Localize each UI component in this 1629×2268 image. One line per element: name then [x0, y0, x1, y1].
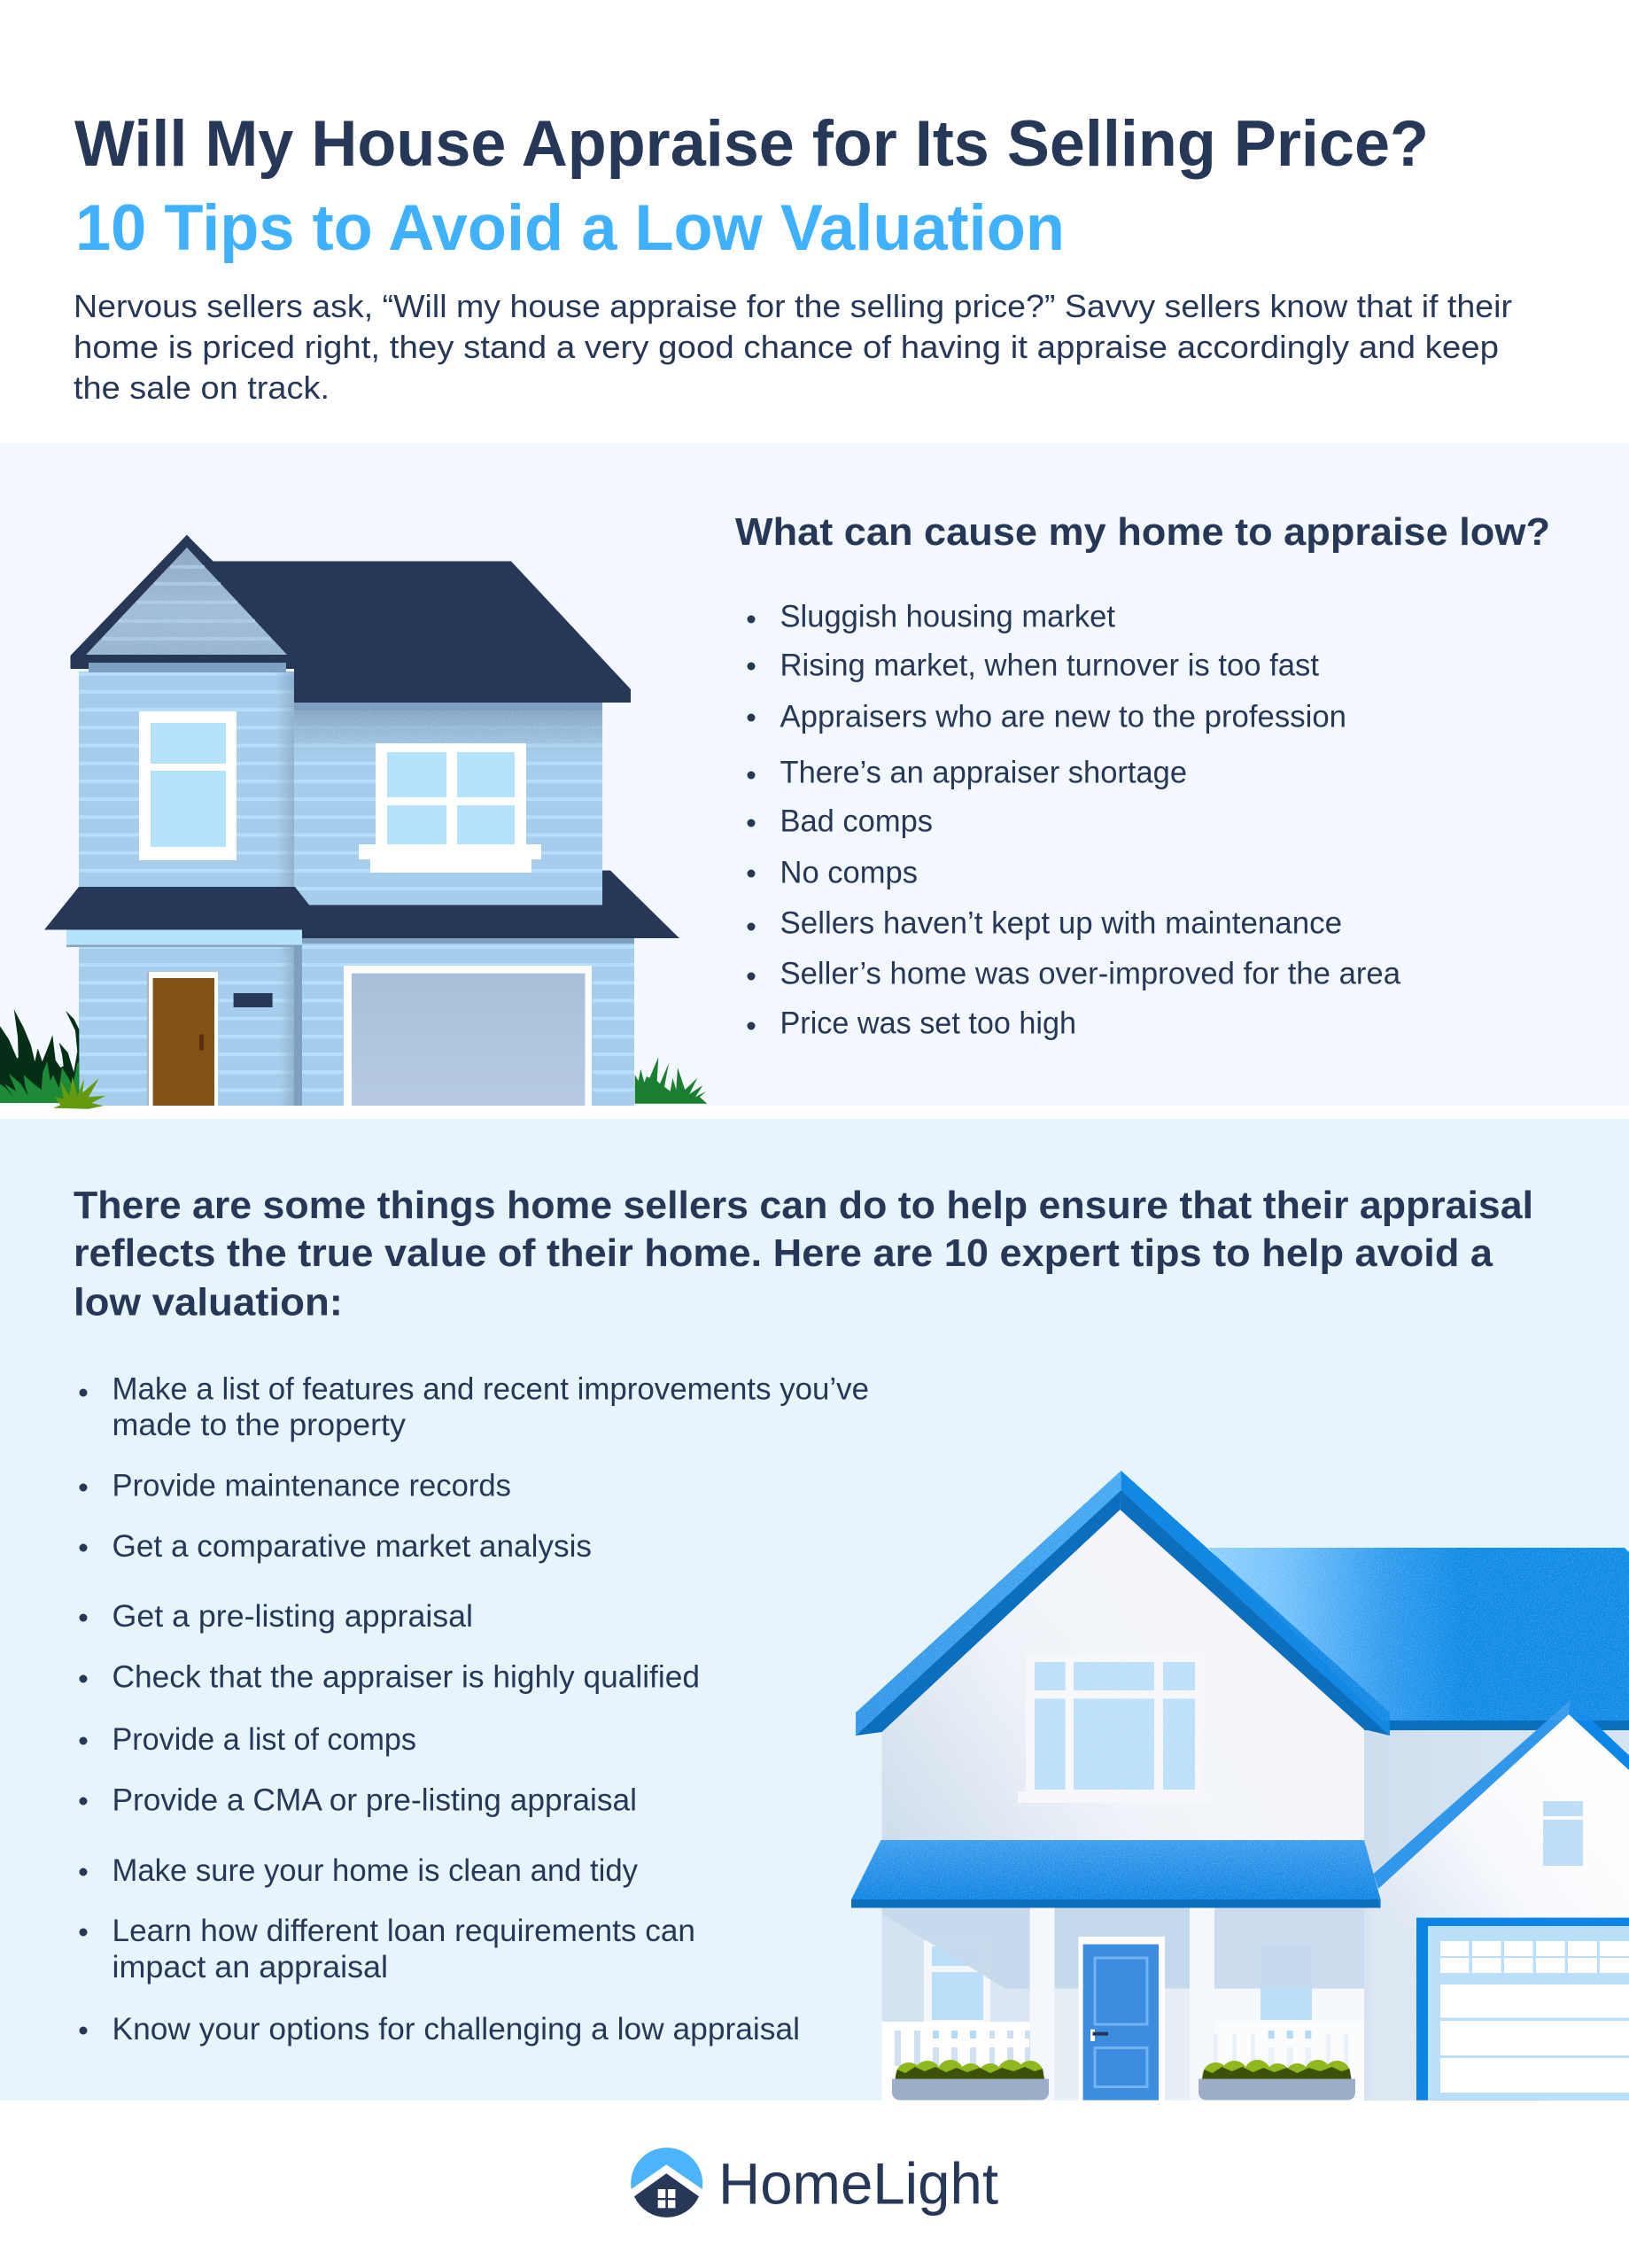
bullet list: causes: Seller’s home was over-improved for the area [780, 957, 1401, 990]
bullet list: causes: Sluggish housing market [780, 599, 1115, 634]
logo icon [631, 2148, 702, 2218]
porch roof [851, 1840, 1381, 1899]
bullet list: causes: Appraisers who are new to the profession [780, 700, 1346, 734]
porch left wall shade [882, 1907, 1030, 2023]
right window with sill [359, 743, 541, 873]
upper wall [882, 1510, 1364, 1843]
bullet list: causes: Sellers haven’t kept up with maintenance [780, 905, 1342, 941]
bullet list: tips: Provide a list of comps [112, 1722, 416, 1757]
intro paragraph: the sale on track. [74, 369, 330, 406]
bullet list: tips: Get a pre-listing appraisal [112, 1599, 473, 1634]
left porch window [924, 1940, 990, 2022]
back roof fascia [1364, 1720, 1629, 1730]
icon: green grass left [0, 1061, 79, 1103]
lower column [1364, 1887, 1417, 2101]
house number plate [234, 993, 273, 1007]
tower corner shading [275, 672, 294, 887]
bullet list: tips: Know your options for challenging a low appraisal [112, 2012, 800, 2047]
lower roof [44, 870, 679, 938]
lower right wall [302, 938, 634, 1106]
lower left wall [79, 947, 294, 1106]
bullet list: causes: There’s an appraiser shortage [780, 755, 1187, 790]
bullet list: causes: Rising market, when turnover is too fast [780, 649, 1319, 682]
main gable roof right slope [1121, 1471, 1390, 1736]
bullet list: causes: Price was set too high [780, 1006, 1076, 1040]
bullet list: causes: No comps [780, 856, 918, 889]
tower soffit [89, 663, 286, 672]
left window [139, 711, 237, 860]
heading: tips intro: reflects the true value of their home. Here are 10 expert tips to help avoid a [74, 1231, 1493, 1275]
logo wordmark: HomeLight [718, 2150, 998, 2216]
bullet list: tips: Make sure your home is clean and tidy [112, 1853, 638, 1888]
heading: causes: What can cause my home to appraise low? [735, 510, 1550, 554]
back roof [1208, 1548, 1629, 1720]
bullet list: tips: Check that the appraiser is highly qualified [112, 1660, 700, 1694]
right gable roof edge right [1569, 1700, 1629, 1770]
bullet list: tips: made to the property [112, 1408, 407, 1442]
left fence [882, 2022, 1030, 2101]
porch lower wall [882, 1907, 1364, 2101]
left planter [892, 2078, 1049, 2100]
siding grain texture [86, 548, 602, 1103]
right planter [1198, 2078, 1355, 2100]
logo: HomeLight [631, 2148, 998, 2218]
left shrubs [895, 2060, 1044, 2089]
illustration: white house with blue roof [851, 1471, 1629, 2101]
porch columns [1029, 1907, 1214, 2101]
illustration: blue two-storey house [0, 535, 707, 1109]
lower soffit [302, 938, 634, 944]
right porch window [1261, 1946, 1312, 2020]
small gable window [1543, 1801, 1583, 1866]
upper window [1018, 1655, 1211, 1803]
main gable roof right underside [1120, 1490, 1390, 1736]
bullet list: tips: Make a list of features and recent improvements you’ve [112, 1371, 869, 1407]
panel: expert tips [0, 1119, 1629, 2101]
porch fascia [66, 929, 302, 944]
heading: tips intro: low valuation: [74, 1281, 343, 1324]
intro paragraph: home is priced right, they stand a very good chance of having it appraise accordingly and keep [74, 329, 1499, 365]
icon: green grass right [635, 1057, 707, 1104]
intro paragraph [74, 288, 1512, 406]
right soffit [294, 703, 602, 711]
bullet list: tips [80, 1371, 869, 2047]
back wall [1364, 1730, 1629, 1907]
right wall [294, 703, 602, 905]
main gable roof left slope [856, 1471, 1121, 1736]
icon: yellow-green tuft [53, 1076, 105, 1109]
roof and wall grain texture [851, 1471, 1629, 2101]
gable outer roof [71, 535, 295, 669]
bullet list: causes [748, 599, 1401, 1040]
bullet list: tips: Provide a CMA or pre-listing appraisal [112, 1783, 637, 1818]
bullet list: tips: impact an appraisal [112, 1950, 388, 1984]
corner column [294, 930, 302, 1106]
icon: dark grass left [0, 1009, 79, 1103]
main gable roof left underside [856, 1490, 1121, 1736]
garage [1416, 1918, 1629, 2101]
gable infill [86, 548, 287, 655]
bullet list: tips: Provide maintenance records [112, 1469, 511, 1503]
heading: tips intro: There are some things home sellers can do to help ensure that their appraisal [74, 1184, 1533, 1227]
gable siding stripes [103, 567, 271, 639]
subtitle: 10 Tips to Avoid a Low Valuation [75, 192, 1065, 264]
title: Will My House Appraise for Its Selling Price? [74, 108, 1429, 180]
bullet list: causes: Bad comps [780, 804, 933, 838]
heading: tips intro [74, 1184, 1533, 1324]
panel: causes of low appraisal [0, 443, 1629, 1109]
right wall top shading [294, 711, 602, 755]
tower wall [79, 672, 294, 887]
bullet list: tips: Get a comparative market analysis [112, 1529, 592, 1564]
intro paragraph: Nervous sellers ask, “Will my house appraise for the selling price?” Savvy sellers know that if their [74, 288, 1512, 324]
porch roof fascia [851, 1899, 1381, 1908]
porch shadows [882, 1907, 1364, 1989]
front door [1079, 1937, 1165, 2101]
bullet list: tips: Learn how different loan requirements can [112, 1914, 695, 1948]
front door [147, 972, 218, 1106]
main roof [187, 535, 631, 703]
right gable wall [1378, 1714, 1629, 2101]
right shrubs [1202, 2060, 1352, 2089]
right fence [1214, 2022, 1364, 2101]
right gable roof edge left [1374, 1700, 1571, 1889]
garage door [344, 966, 592, 1106]
